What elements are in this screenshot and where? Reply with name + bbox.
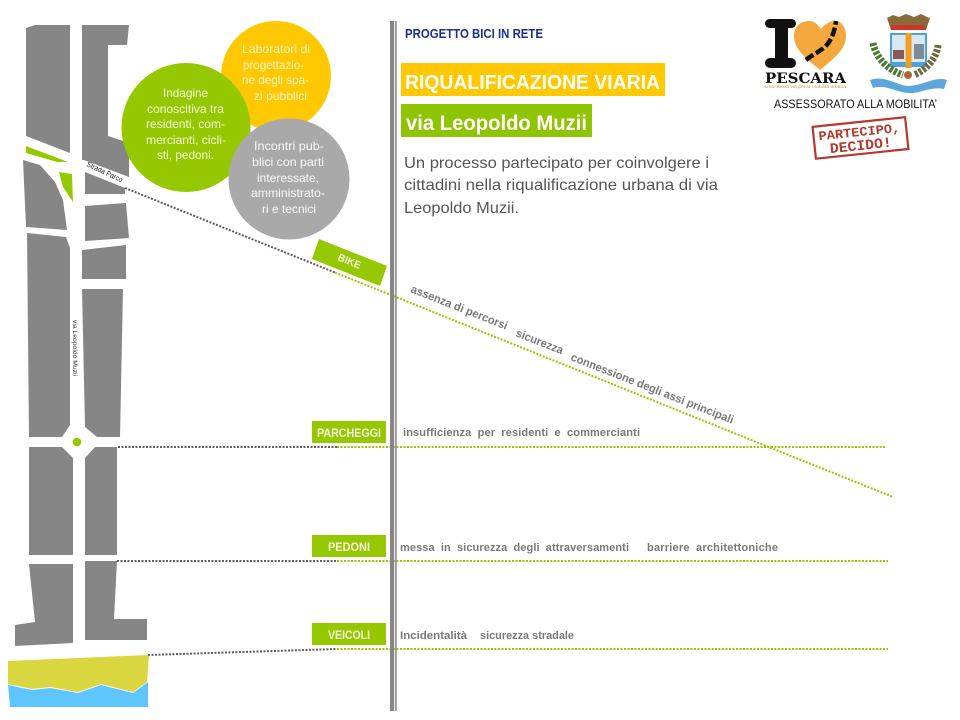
intro paragraph: cittadini nella riqualificazione urbana di via: [404, 177, 718, 194]
title: riqualificazione viaria: [401, 63, 665, 96]
logo: I love Pescara: PESCARA: [765, 71, 847, 87]
bike issues: connessione degli assi principali: [569, 352, 735, 427]
title: riqualificazione viaria: RIQUALIFICAZIONE VIARIA: [405, 71, 660, 94]
tag: pedoni: [312, 535, 386, 557]
veicoli issues: Incidentalità: [400, 630, 468, 642]
intro paragraph: Leopoldo Muzii.: [404, 200, 519, 217]
tag: parcheggi: [312, 421, 386, 443]
bike issues: [409, 284, 735, 427]
circle: incontri: Incontri pub-: [254, 139, 324, 153]
circle: indagine: mercianti, cicli-: [146, 133, 226, 147]
circle: laboratori: zi pubblici: [254, 89, 307, 103]
circle: indagine: Indagine: [163, 86, 208, 100]
circle: incontri: interessate,: [257, 171, 319, 185]
map label: Strada Parco: Strada Parco: [85, 160, 124, 184]
tag: pedoni: PEDONI: [328, 542, 370, 554]
veicoli issues: sicurezza stradale: [480, 630, 574, 642]
circle: laboratori: progettazio-: [243, 58, 304, 72]
bike issues: sicurezza: [514, 328, 565, 357]
street map: [15, 25, 147, 646]
department label: ASSESSORATO ALLA MOBILITA’: [774, 99, 937, 111]
bike issues: assenza di percorsi: [409, 284, 509, 333]
circle: indagine: conoscitiva tra: [147, 102, 224, 116]
circle: indagine: [122, 63, 250, 192]
parcheggi issues: insufficienza per residenti e commercianti: [403, 427, 640, 439]
logo: I love Pescara: [765, 19, 847, 89]
map label: via Leopoldo Muzii: via Leopoldo Muzii: [71, 320, 78, 376]
stamp: partecipo decido: DECIDO!: [829, 136, 893, 158]
pedoni issues: [400, 542, 778, 554]
beach and sea: [8, 655, 149, 707]
tag: veicoli: VEICOLI: [328, 630, 370, 642]
tag: bike: [312, 239, 387, 286]
intro paragraph: [404, 155, 718, 217]
subtitle: via Leopoldo Muzii: via Leopoldo Muzii: [406, 111, 587, 135]
project heading: PROGETTO BICI IN RETE: [405, 27, 543, 41]
circle: incontri: ri e tecnici: [262, 202, 316, 216]
tag: veicoli: [312, 623, 386, 645]
logo: I love Pescara: Una nuova via per la mobilità urbana: [765, 84, 847, 89]
pedoni issues: barriere architettoniche: [647, 542, 778, 554]
dotted connector lines: [117, 188, 893, 655]
stamp: partecipo decido: PARTECIPO,: [818, 121, 901, 144]
circle: indagine: residenti, com-: [146, 117, 225, 131]
circle: incontri: blici con parti: [252, 155, 324, 169]
circle: laboratori: [221, 21, 331, 131]
icon: coat of arms: [870, 14, 947, 93]
circle: indagine: sti, pedoni.: [157, 148, 214, 162]
tag: parcheggi: PARCHEGGI: [317, 428, 381, 440]
circle: laboratori: ne degli spa-: [242, 73, 309, 87]
subtitle: via Leopoldo Muzii: [401, 104, 592, 137]
tag: bike: BIKE: [336, 252, 363, 272]
veicoli issues: [400, 630, 574, 642]
pedoni issues: messa in sicurezza degli attraversamenti: [400, 542, 629, 554]
stamp: partecipo decido: [813, 117, 909, 160]
circle: laboratori: Laboratori di: [242, 42, 310, 56]
vertical divider: [390, 21, 397, 711]
circle: incontri: amministrato-: [251, 186, 325, 200]
circle: incontri: [228, 118, 350, 240]
intro paragraph: Un processo partecipato per coinvolgere i: [404, 155, 709, 172]
